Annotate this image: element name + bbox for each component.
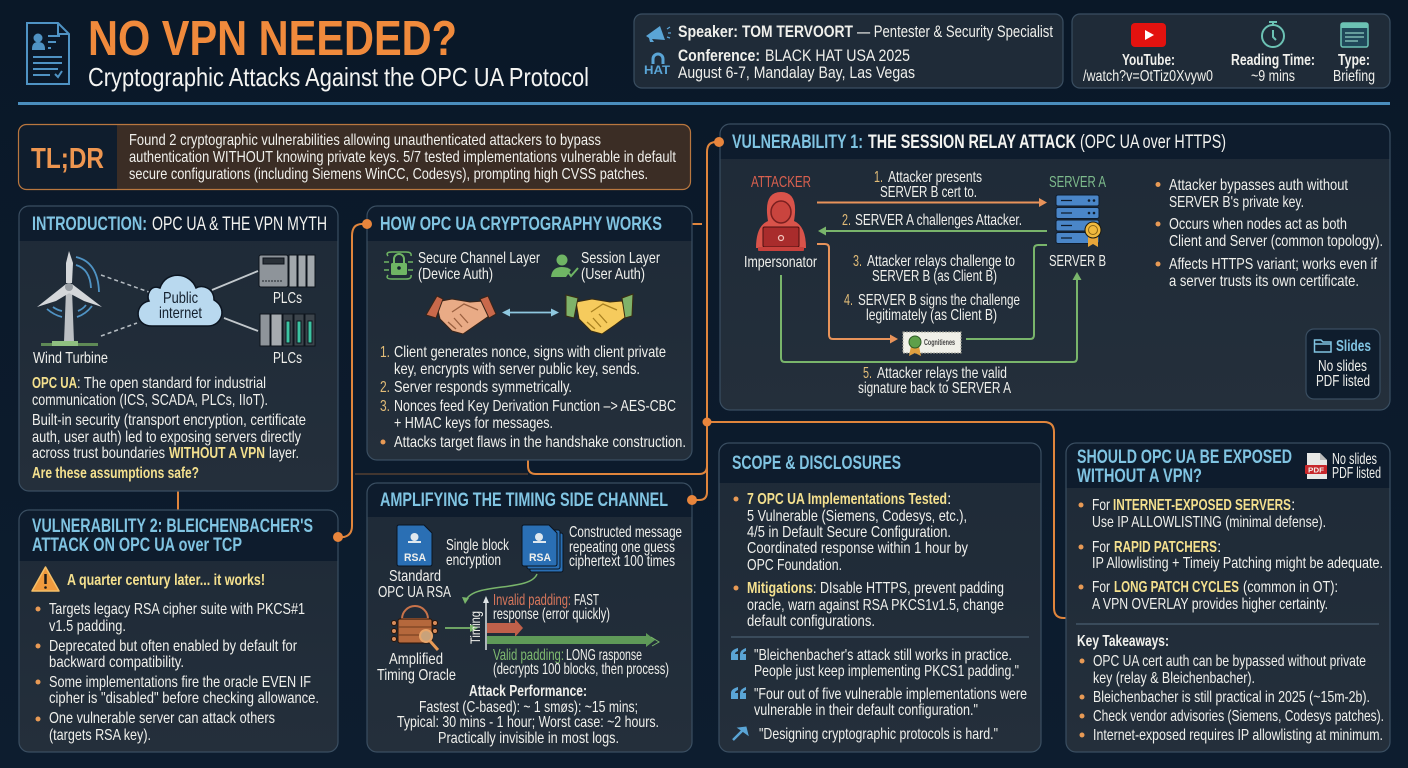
connector nodes <box>333 137 724 542</box>
heading <box>32 214 327 235</box>
icon: RSA document <box>397 525 432 566</box>
text: implementations tested <box>734 491 968 574</box>
text: session layer <box>581 250 661 283</box>
label: constructed message: ciphertext 100 times <box>569 553 675 570</box>
icon: handshake right <box>566 294 633 334</box>
timing chart: Invalid padding: <box>493 592 571 609</box>
step 1: 1. <box>874 169 883 186</box>
text: OPC UA description: Built-in security (transport encryption, certificate <box>32 412 306 429</box>
youtube text <box>1083 52 1213 85</box>
panel: scope and disclosures <box>719 443 1041 752</box>
arrow: step 2 <box>818 226 1047 236</box>
recommendations list: : <box>1217 539 1221 556</box>
heading: HOW OPC UA CRYPTOGRAPHY WORKS <box>380 214 662 235</box>
icon: stacked RSA documents: RSA <box>529 552 551 564</box>
arrow: two-way <box>502 308 559 316</box>
label: no slides <box>1332 451 1381 482</box>
bullet list: backward compatibility. <box>49 654 184 671</box>
subtitle: Cryptographic Attacks Against the OPC UA Protocol <box>88 62 589 92</box>
text: OPC UA description: WITHOUT A VPN <box>169 445 265 462</box>
label: no slides: No slides <box>1332 451 1377 468</box>
label: server B: SERVER B <box>1049 253 1106 270</box>
text: implementations tested: : <box>947 491 951 508</box>
text: implementations tested: Coordinated response within 1 hour by <box>747 540 968 557</box>
panel: resources <box>1072 14 1390 88</box>
timing chart: response (error quickly) <box>493 606 610 623</box>
heading: OPC UA & THE VPN MYTH <box>152 214 327 235</box>
label: constructed message: repeating one guess <box>569 539 675 556</box>
bullet list: Deprecated but often enabled by default for <box>49 638 298 655</box>
quote 1 <box>754 647 1019 680</box>
timing chart: Valid padding: <box>493 647 564 664</box>
speaker text: TOM TERVOORT <box>742 22 853 41</box>
heading: AMPLIFYING THE TIMING SIDE CHANNEL <box>380 490 668 511</box>
TL;DR text: authentication WITHOUT knowing private keys. 5/7 tested implementations vulnerable in default <box>129 149 676 166</box>
recommendations list: LONG PATCH CYCLES <box>1114 579 1239 596</box>
speaker text: — Pentester & Security Specialist <box>857 22 1053 41</box>
callout: A quarter century later... it works! <box>67 572 265 589</box>
arrow: attacker relays to certificate <box>817 244 898 344</box>
arrow: oracle to chart <box>445 624 478 632</box>
arrow: curved green <box>462 574 537 604</box>
conference text: Conference: <box>678 46 760 65</box>
bullet list: v1.5 padding. <box>49 618 126 635</box>
panel: introduction <box>19 206 338 491</box>
icon: megaphone <box>646 26 671 42</box>
timing chart: Timing <box>467 611 483 644</box>
numbered list: key, encrypts with server public key, sends. <box>394 361 640 378</box>
type text: Briefing <box>1333 68 1375 85</box>
text: attack performance: Typical: 30 mins - 1 hour; Worst case: ~2 hours. <box>397 714 659 731</box>
step 4: SERVER B signs the challenge <box>858 292 1020 309</box>
numbered list: 1. <box>380 344 390 361</box>
text: attack performance: Practically invisible in most logs. <box>438 730 619 747</box>
recommendations list: (common in OT): <box>1243 579 1338 596</box>
text: mitigations: Mitigations <box>747 580 813 597</box>
step 4 <box>844 292 1020 324</box>
label: wind turbine: Wind Turbine <box>33 350 108 367</box>
icon: warning triangle <box>32 567 59 591</box>
label: single block encryption: Single block <box>446 537 510 554</box>
callout: slides: Slides <box>1336 338 1371 355</box>
label: PLCs bottom: PLCs <box>273 350 302 367</box>
text: OPC UA description: Are these assumptions safe? <box>32 465 199 482</box>
icon: hooded attacker <box>756 192 806 251</box>
label: PLCs top: PLCs <box>273 290 302 307</box>
icon: server with certificate <box>1056 195 1101 247</box>
label: standard OPC UA RSA: OPC UA RSA <box>378 584 451 601</box>
icon: wind turbine <box>37 251 102 346</box>
heading: key takeaways: Key Takeaways: <box>1077 633 1169 650</box>
text: mitigations: default configurations. <box>747 613 875 630</box>
icon: amplified timing oracle <box>392 606 438 650</box>
recommendations list <box>1078 497 1383 613</box>
label: server A: SERVER A <box>1049 174 1106 191</box>
heading: SCOPE & DISCLOSURES <box>732 453 901 474</box>
bullet list: Targets legacy RSA cipher suite with PKCS#1 <box>49 601 305 618</box>
text: OPC UA description: communication (ICS, SCADA, PLCs, IIoT). <box>32 392 268 409</box>
icon: quote mark <box>731 648 746 660</box>
numbered list: Nonces feed Key Derivation Function –> AES-CBC <box>394 398 676 415</box>
step 5: Attacker relays the valid <box>877 365 1007 382</box>
text: OPC UA description: auth, user auth) led to exposing servers directly <box>32 429 301 446</box>
recommendations list: For <box>1092 497 1111 514</box>
label: single block encryption <box>446 537 510 569</box>
reading time text: ~9 mins <box>1251 68 1295 85</box>
bullet list: cipher is "disabled" before checking allowance. <box>49 690 319 707</box>
recommendations list: A VPN OVERLAY provides higher certainty. <box>1092 596 1328 613</box>
icon: padlock circuit <box>384 252 413 279</box>
icon: stacked RSA documents <box>522 525 563 572</box>
heading: SHOULD OPC UA BE EXPOSED <box>1077 447 1292 468</box>
step 3: 3. <box>853 253 862 270</box>
text: secure channel layer: Secure Channel Layer <box>418 250 541 267</box>
label: standard OPC UA RSA: Standard <box>389 568 441 585</box>
timing chart: FAST <box>574 592 599 609</box>
callout: slides: PDF listed <box>1316 373 1370 390</box>
panel: should OPC UA be exposed <box>1066 443 1390 752</box>
quote 2: vulnerable in their default configuration." <box>754 702 978 719</box>
heading: ATTACK ON OPC UA over TCP <box>32 535 242 556</box>
quote 2 <box>754 686 1027 719</box>
conference text: BLACK HAT USA 2025 <box>765 46 910 65</box>
text: implementations tested: 7 OPC UA Implementations Tested <box>747 491 947 508</box>
heading: VULNERABILITY 1: <box>732 132 863 153</box>
connectors between panels <box>178 142 1066 618</box>
heading: THE SESSION RELAY ATTACK <box>868 132 1076 153</box>
icon: black hat logo: HAT <box>644 63 671 77</box>
label: standard OPC UA RSA <box>378 568 451 601</box>
key takeaways list <box>1080 653 1384 744</box>
heading: VULNERABILITY 2: BLEICHENBACHER'S <box>32 516 313 537</box>
label: constructed message: Constructed message <box>569 524 682 541</box>
quote 1: "Bleichenbacher's attack still works in practice. <box>754 647 1012 664</box>
TL;DR label: TL;DR <box>31 143 104 175</box>
bullet list: a server trusts its own certificate. <box>1169 273 1359 290</box>
title: NO VPN NEEDED? <box>88 12 457 66</box>
step 3 <box>853 253 1015 285</box>
bullet list <box>1156 177 1383 290</box>
text: session layer: (User Auth) <box>581 266 645 283</box>
text: attack performance <box>397 683 659 747</box>
label: constructed message <box>569 524 682 570</box>
icon: handshake left <box>426 296 496 334</box>
network diagram lines <box>101 271 258 336</box>
icon: PLC bottom <box>260 314 315 346</box>
numbered list <box>380 344 686 451</box>
bullet list: Occurs when nodes act as both <box>1169 216 1347 233</box>
callout: slides: No slides <box>1318 358 1367 375</box>
numbered list: 3. <box>380 398 390 415</box>
step 5 <box>858 365 1011 397</box>
TL;DR text <box>129 132 676 183</box>
icon: youtube <box>1131 23 1166 47</box>
recommendations list: RAPID PATCHERS <box>1114 539 1217 556</box>
heading <box>32 516 313 556</box>
conference text: August 6-7, Mandalay Bay, Las Vegas <box>678 63 915 82</box>
label: amplified timing oracle <box>377 651 456 684</box>
icon: black hat logo <box>644 54 671 77</box>
text: secure channel layer <box>418 250 541 283</box>
text: session layer: Session Layer <box>581 250 661 267</box>
step 3: SERVER B (as Client B) <box>872 268 997 285</box>
numbered list: + HMAC keys for messages. <box>394 415 553 432</box>
label: no slides: PDF listed <box>1332 465 1381 482</box>
icon: document window <box>1341 23 1368 47</box>
icon: timer <box>1262 22 1284 47</box>
icon: signed certificate: Cognitienes <box>924 338 955 347</box>
header icon: document <box>27 23 69 84</box>
step 5: 5. <box>863 365 872 382</box>
icon: PDF file: PDF <box>1308 466 1324 474</box>
text: OPC UA description: layer. <box>269 445 299 462</box>
quote 3: "Designing cryptographic protocols is hard." <box>759 726 998 743</box>
step 1: Attacker presents <box>888 169 982 186</box>
recommendations list: For <box>1092 579 1111 596</box>
bullet list <box>36 601 319 744</box>
step 5: signature back to SERVER A <box>858 380 1011 397</box>
icon: public internet cloud <box>138 275 222 326</box>
heading <box>1077 447 1292 487</box>
callout: slides <box>1306 329 1380 399</box>
numbered list: 2. <box>380 379 390 396</box>
heading: INTRODUCTION: <box>32 214 147 235</box>
label: single block encryption: encryption <box>446 552 501 569</box>
icon: RSA document: RSA <box>404 552 426 564</box>
numbered list: Server responds symmetrically. <box>394 379 572 396</box>
label: amplified timing oracle: Amplified <box>389 651 443 668</box>
quote 2: "Four out of five vulnerable implementations were <box>754 686 1027 703</box>
reading time text: Reading Time: <box>1231 52 1315 69</box>
text: mitigations <box>734 580 1004 630</box>
panel: vulnerability 2 <box>19 510 338 752</box>
arrow: step 1 <box>817 198 1047 207</box>
bullet list: SERVER B's private key. <box>1169 194 1304 211</box>
text: attack performance: Attack Performance: <box>469 683 587 700</box>
timing chart: LONG rasponse <box>566 647 642 664</box>
recommendations list: For <box>1092 539 1111 556</box>
bullet list: (targets RSA key). <box>49 727 151 744</box>
recommendations list: : <box>1291 497 1295 514</box>
step 1: SERVER B cert to. <box>880 184 977 201</box>
bullet list: One vulnerable server can attack others <box>49 710 275 727</box>
speaker text <box>678 22 1053 41</box>
arrow: step 5 relay <box>781 272 1082 362</box>
numbered list: Client generates nonce, signs with client private <box>394 344 666 361</box>
step 4: legitimately (as Client B) <box>866 307 997 324</box>
panel: how OPC UA cryptography works <box>367 206 692 460</box>
text: implementations tested: 5 Vulnerable (Siemens, Codesys, etc.), <box>747 508 967 525</box>
icon: public internet cloud: internet <box>159 305 202 322</box>
heading: (OPC UA over HTTPS) <box>1080 132 1226 153</box>
step 3: Attacker relays challenge to <box>867 253 1015 270</box>
panel: TL;DR <box>18 124 691 190</box>
type text <box>1333 52 1375 85</box>
text: implementations tested: OPC Foundation. <box>747 557 842 574</box>
step 4: 4. <box>844 292 853 309</box>
reading time text <box>1231 52 1315 85</box>
icon: signed certificate <box>903 332 961 356</box>
recommendations list: Use IP ALLOWLISTING (minimal defense). <box>1092 514 1326 531</box>
type text: Type: <box>1338 52 1370 69</box>
TL;DR text: secure configurations (including Siemens WinCC, Codesys), prompting high CVSS patches. <box>129 166 648 183</box>
quote 1: People just keep implementing PKCS1 padding." <box>754 663 1019 680</box>
conference text <box>678 46 915 82</box>
recommendations list: INTERNET-EXPOSED SERVERS <box>1113 497 1291 514</box>
icon: PDF file <box>1305 453 1327 479</box>
bullet list: Some implementations fire the oracle EVEN IF <box>49 674 311 691</box>
speaker text: Speaker: <box>678 22 738 41</box>
text: OPC UA description: OPC UA <box>32 375 77 392</box>
icon: public internet cloud: Public <box>163 290 198 307</box>
label: impersonator: Impersonator <box>744 254 818 271</box>
text: attack performance: Fastest (C-based): ~ 1 smøs): ~15 mins; <box>419 699 638 716</box>
step 2 <box>842 212 1022 229</box>
text: OPC UA description: across trust boundaries <box>32 445 165 462</box>
heading <box>732 132 1226 153</box>
key takeaways list: key (relay & Bleichenbacher). <box>1093 670 1255 687</box>
icon: user check <box>551 254 578 277</box>
heading: WITHOUT A VPN? <box>1077 466 1202 487</box>
arrow: certificate to server <box>966 245 1047 339</box>
step 2: 2. <box>842 212 851 229</box>
panel: amplifying the timing side channel <box>367 483 692 752</box>
step 1 <box>874 169 982 201</box>
timing chart: (decrypts 100 blocks, then process) <box>493 661 669 678</box>
TL;DR text: Found 2 cryptographic vulnerabilities allowing unauthenticated attackers to bypass <box>129 132 601 149</box>
text: OPC UA description <box>32 375 306 482</box>
bullet list: Attacker bypasses auth without <box>1169 177 1348 194</box>
text: implementations tested: 4/5 in Default Secure Configuration. <box>747 524 951 541</box>
text: OPC UA description: : The open standard for industrial <box>77 375 266 392</box>
youtube text: /watch?v=OtTiz0Xvyw0 <box>1083 68 1213 85</box>
timing chart <box>467 592 669 678</box>
numbered list: Attacks target flaws in the handshake construction. <box>394 434 686 451</box>
label: attacker: ATTACKER <box>751 174 811 191</box>
text: mitigations: : DIsable HTTPS, prevent padding <box>813 580 1004 597</box>
text: secure channel layer: (Device Auth) <box>418 266 493 283</box>
step 2: SERVER A challenges Attacker. <box>855 212 1022 229</box>
text: mitigations: oracle, warn against RSA PKCS1v1.5, change <box>747 597 1004 614</box>
icon: quote mark <box>731 687 746 699</box>
panel: vulnerability 1 <box>720 124 1390 410</box>
panel: speaker and conference <box>634 14 1063 88</box>
icon: PLC top <box>259 255 315 287</box>
youtube text: YouTube: <box>1122 52 1175 69</box>
label: amplified timing oracle: Timing Oracle <box>377 667 456 684</box>
icon: hammer <box>733 727 748 740</box>
